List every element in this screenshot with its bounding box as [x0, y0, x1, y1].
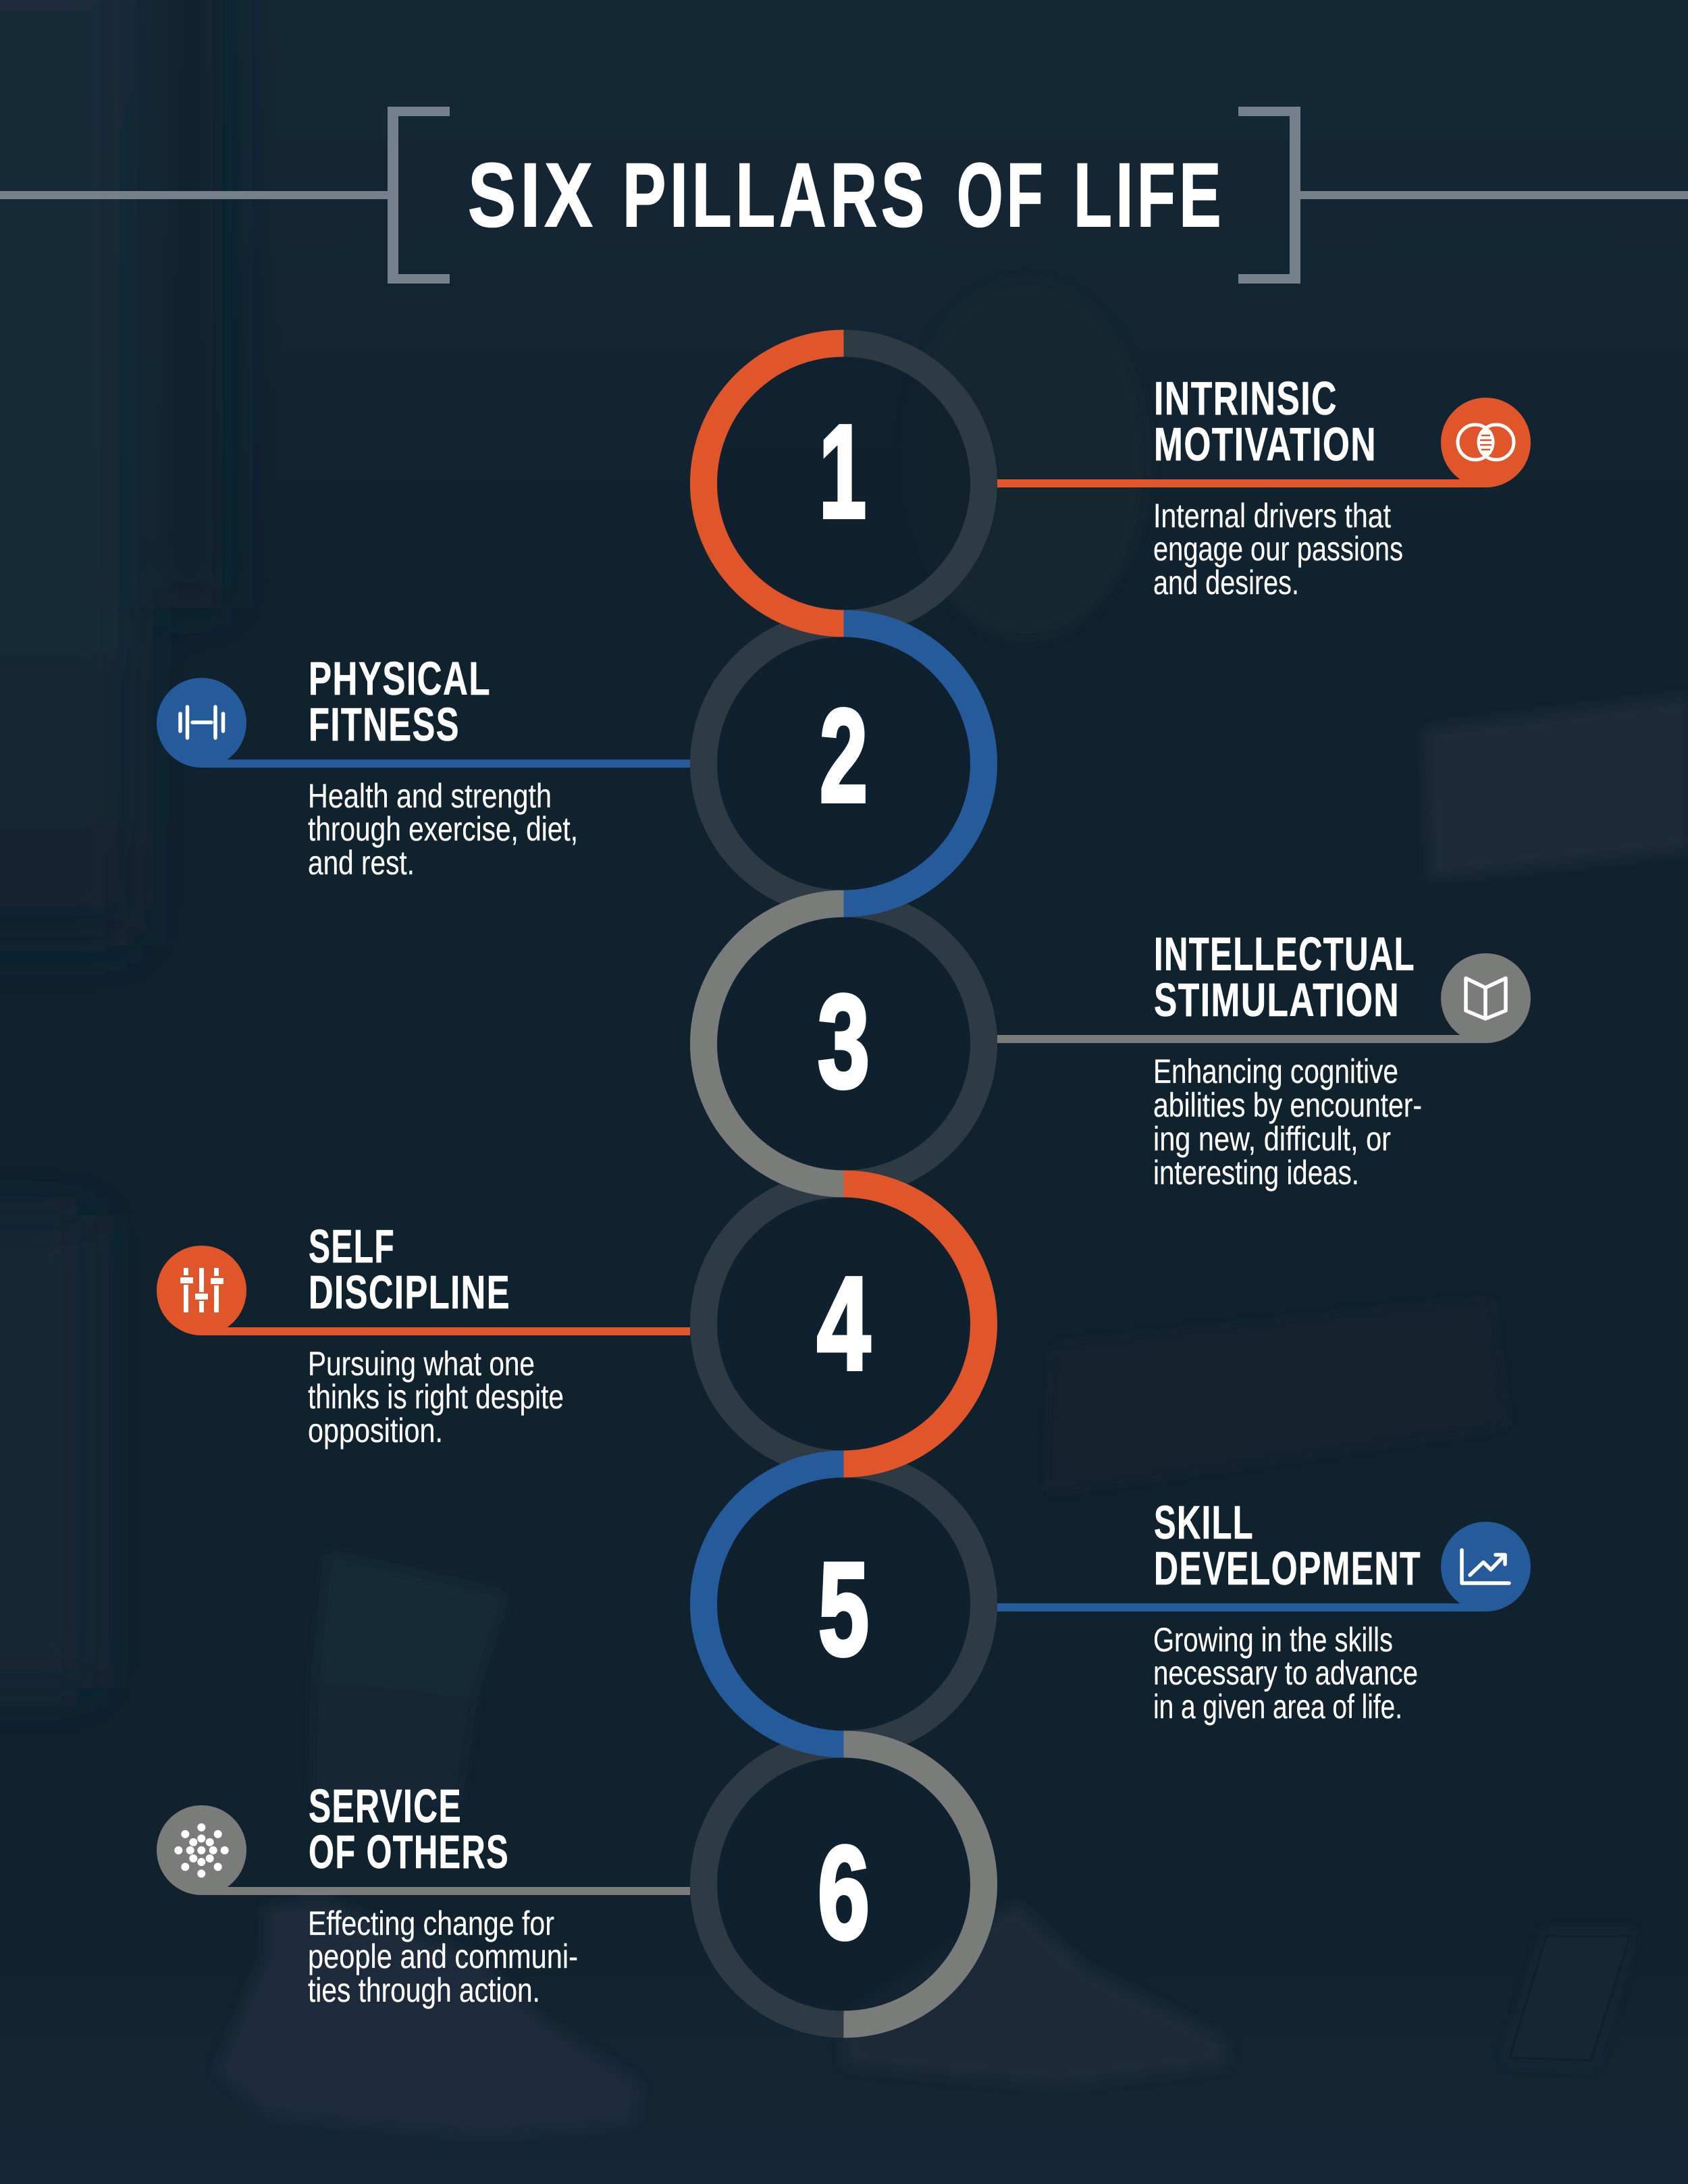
ring 4: 4 — [817, 1250, 870, 1397]
title: SIX — [468, 145, 597, 246]
connector and badge — [997, 953, 1531, 1043]
ring tracks — [704, 343, 984, 2024]
ring 6 — [818, 1744, 984, 2024]
ring 6: 6 — [818, 1819, 870, 1967]
heading: STIMULATION — [1154, 974, 1400, 1026]
ring 2: 2 — [820, 682, 868, 830]
heading — [309, 1780, 509, 1878]
description: Internal drivers that — [1153, 497, 1391, 535]
ring 3: 3 — [818, 967, 870, 1115]
description: in a given area of life. — [1153, 1688, 1402, 1726]
title: OF — [957, 145, 1047, 246]
heading — [309, 652, 491, 751]
heading — [1154, 372, 1377, 471]
description: Health and strength — [308, 777, 552, 815]
title bracket and rules — [0, 107, 1688, 284]
ring 4 — [817, 1184, 984, 1464]
pillar 5: skill development — [997, 1496, 1531, 1726]
description: ing new, difficult, or — [1153, 1120, 1391, 1158]
icon: open book — [1466, 978, 1506, 1019]
description — [308, 1905, 578, 2009]
heading: DEVELOPMENT — [1154, 1542, 1421, 1595]
connector and badge — [997, 1522, 1531, 1612]
description: ties through action. — [308, 1971, 540, 2009]
heading — [309, 1220, 510, 1319]
description: through exercise, diet, — [308, 810, 578, 848]
description: necessary to advance — [1153, 1654, 1418, 1692]
heading: SELF — [309, 1220, 395, 1273]
pillar 6: service of others — [157, 1780, 690, 2009]
description — [1153, 1621, 1418, 1726]
ring 5 — [704, 1464, 869, 1744]
ring 5: 5 — [818, 1535, 869, 1683]
heading: OF OTHERS — [309, 1826, 509, 1878]
description: thinks is right despite — [308, 1378, 564, 1416]
heading: INTRINSIC — [1154, 372, 1338, 425]
ring 3 — [704, 903, 870, 1184]
icon: dot cluster — [174, 1823, 229, 1877]
description — [1153, 497, 1403, 602]
description: Growing in the skills — [1153, 1621, 1393, 1659]
ring 2 — [820, 624, 984, 903]
heading — [1154, 1496, 1421, 1595]
ring 1: 1 — [819, 398, 866, 545]
title: LIFE — [1074, 145, 1225, 246]
description: and rest. — [308, 844, 415, 882]
connector and badge — [157, 1805, 690, 1895]
description — [308, 777, 578, 882]
icon: sliders — [180, 1268, 223, 1312]
description: engage our passions — [1153, 530, 1403, 568]
description: Effecting change for — [308, 1905, 554, 1942]
description: and desires. — [1153, 564, 1299, 602]
heading: MOTIVATION — [1154, 418, 1377, 471]
connector and badge — [157, 678, 690, 768]
heading: INTELLECTUAL — [1154, 928, 1415, 980]
heading: SERVICE — [309, 1780, 462, 1832]
pillar 4: self discipline — [157, 1220, 690, 1449]
heading — [1154, 928, 1415, 1026]
heading: FITNESS — [309, 698, 460, 751]
description — [1153, 1053, 1422, 1192]
icon: growth chart — [1462, 1550, 1509, 1583]
description: Pursuing what one — [308, 1345, 535, 1383]
pillar 1: intrinsic motivation — [997, 372, 1531, 602]
heading: DISCIPLINE — [309, 1266, 510, 1319]
pillar 2: physical fitness — [157, 652, 690, 882]
icon: overlapping circles — [1458, 425, 1514, 460]
description: people and communi- — [308, 1938, 578, 1975]
title: PILLARS — [623, 145, 928, 246]
description: interesting ideas. — [1153, 1154, 1359, 1192]
ring 1 — [704, 343, 866, 624]
title — [468, 145, 1225, 246]
heading: SKILL — [1154, 1496, 1254, 1549]
description: opposition. — [308, 1412, 443, 1449]
icon: dumbbell — [180, 707, 223, 738]
pillar 3: intellectual stimulation — [997, 928, 1531, 1192]
description: Enhancing cognitive — [1153, 1053, 1398, 1090]
connector and badge — [997, 398, 1531, 487]
heading: PHYSICAL — [309, 652, 491, 705]
description: abilities by encounter- — [1153, 1086, 1422, 1124]
description — [308, 1345, 564, 1449]
connector and badge — [157, 1246, 690, 1335]
